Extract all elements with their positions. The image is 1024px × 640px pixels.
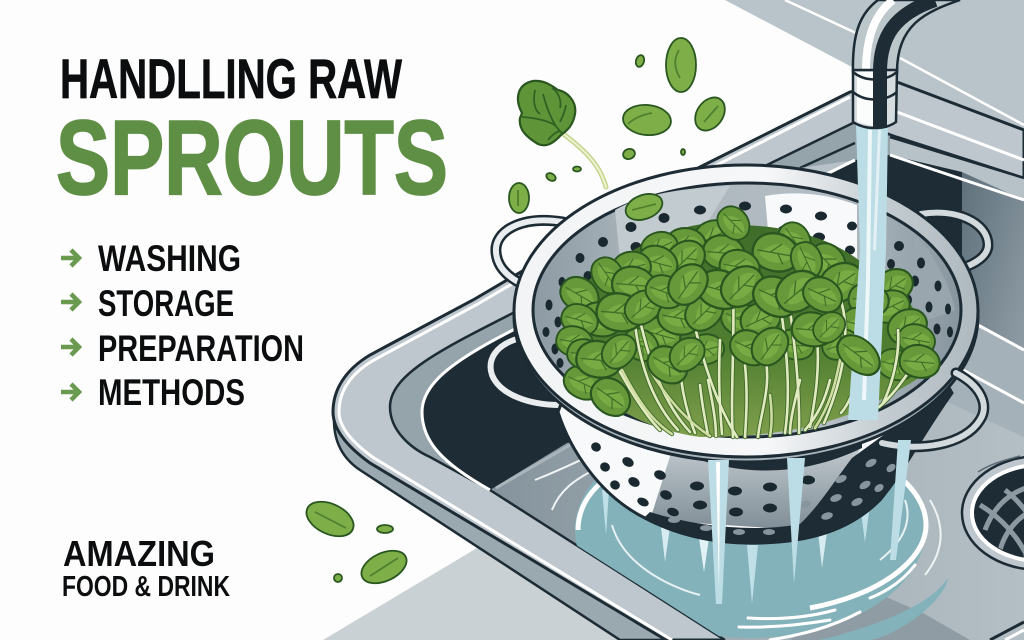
- sprout stems: [615, 290, 910, 437]
- bowl holes: [542, 202, 953, 368]
- sink outer lip shadow: [334, 420, 690, 640]
- drain: [962, 456, 1024, 570]
- water drips below colander: [602, 490, 870, 604]
- title: [56, 47, 448, 217]
- countertop: upper right: [725, 0, 1024, 140]
- sprouts: [553, 200, 942, 437]
- sink edge bottom right: [990, 622, 1024, 640]
- flying sprout with stem: [518, 81, 606, 187]
- faucet pipe: [853, 0, 960, 72]
- stainless steel sink: [333, 82, 1024, 640]
- colander exterior: [558, 387, 954, 545]
- flying leaves: [301, 38, 731, 590]
- colander front right handle: [882, 373, 984, 447]
- title line: sprouts: SPROUTS: [56, 99, 448, 217]
- list item: washing: [61, 238, 241, 279]
- floor shadow bottom: [790, 590, 970, 640]
- water stream from faucet: [848, 125, 888, 420]
- colander bowl interior: [533, 183, 961, 437]
- brand block: FOOD & DRINK: [62, 571, 230, 603]
- sprout leaves front: [574, 200, 942, 391]
- colander dark side: [645, 390, 950, 542]
- brand block: [62, 533, 230, 603]
- sprout leaves back: [553, 215, 939, 423]
- bowl highlight: [765, 193, 857, 270]
- water pool: [534, 460, 948, 640]
- list item: methods: [61, 372, 245, 413]
- sink basin dark interior: [422, 155, 962, 500]
- sink floor: [490, 400, 1024, 640]
- sprout mass: [564, 223, 935, 437]
- list item: methods: METHODS: [98, 372, 245, 413]
- title line: handling raw: HANDLLING RAW: [60, 47, 402, 110]
- faucet: [853, 0, 960, 128]
- sink rim: [333, 82, 1024, 640]
- list item: storage: [61, 283, 234, 324]
- topic list: [61, 238, 304, 413]
- list item: preparation: PREPARATION: [98, 328, 304, 369]
- water streams over colander: [708, 440, 911, 604]
- sink right ledge: [943, 318, 1024, 440]
- front leaf over stream: [831, 328, 887, 382]
- faucet collar: [853, 70, 897, 128]
- brand block: AMAZING: [63, 533, 215, 574]
- sink right wall: [962, 172, 1024, 400]
- countertop: lower left: [323, 545, 740, 640]
- list item: preparation: [61, 328, 304, 369]
- list item: washing: WASHING: [98, 238, 241, 279]
- colander shaded middle: [650, 450, 860, 530]
- colander rim: [514, 165, 978, 462]
- sink inner wall band: [390, 122, 1024, 490]
- colander holes: [589, 441, 815, 518]
- list item: storage: STORAGE: [98, 283, 234, 324]
- colander back handles: [491, 213, 988, 405]
